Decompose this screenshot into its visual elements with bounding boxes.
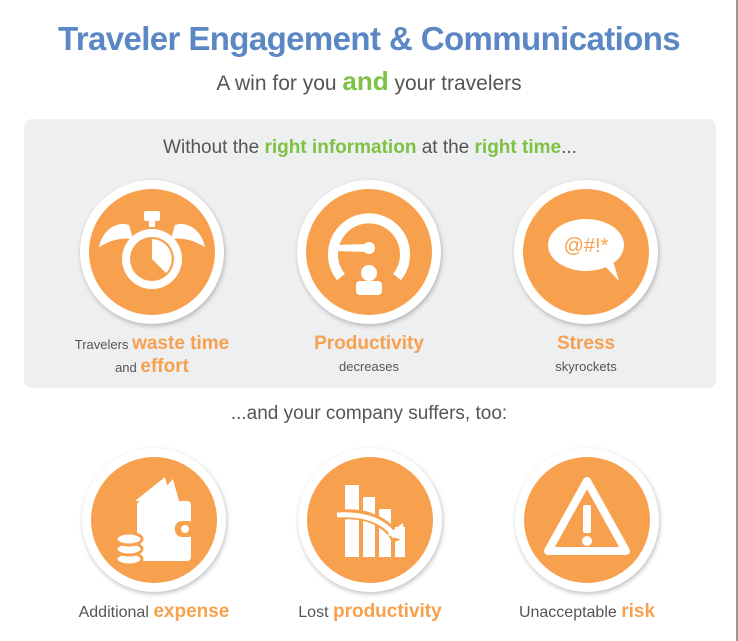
label: stress skyrockets: Stress <box>557 333 615 354</box>
icon: wallet <box>82 448 226 592</box>
panel: without the right information <box>24 119 716 388</box>
label: unacceptable risk: Unacceptable risk <box>519 601 655 622</box>
subheading: company suffers: ...and your company suffers, too: <box>231 403 507 424</box>
panel heading: Without the right information at the right time... <box>163 137 577 158</box>
label: stress skyrockets <box>555 333 617 374</box>
subtitle: A win for you and your travelers <box>216 66 522 96</box>
icon: warning <box>515 448 659 592</box>
label: lost productivity: Lost productivity <box>298 601 442 622</box>
label: waste time: Travelers waste time <box>75 333 229 354</box>
label: productivity decreases: decreases <box>339 359 399 374</box>
icon: stopwatch with wings <box>80 180 224 324</box>
label: productivity decreases: Productivity <box>314 333 424 354</box>
icon: speech bubble <box>514 180 658 324</box>
title: Traveler Engagement & Communications <box>58 20 680 57</box>
icon: speedometer <box>297 180 441 324</box>
label: productivity decreases <box>314 333 424 374</box>
page border <box>736 0 738 641</box>
label: additional expense: Additional expense <box>79 601 229 622</box>
icon: speech bubble: @#!* <box>564 235 609 257</box>
icon: declining bars <box>298 448 442 592</box>
label: waste time <box>75 333 229 377</box>
label: waste time: and effort <box>115 356 189 377</box>
label: stress skyrockets: skyrockets <box>555 359 617 374</box>
